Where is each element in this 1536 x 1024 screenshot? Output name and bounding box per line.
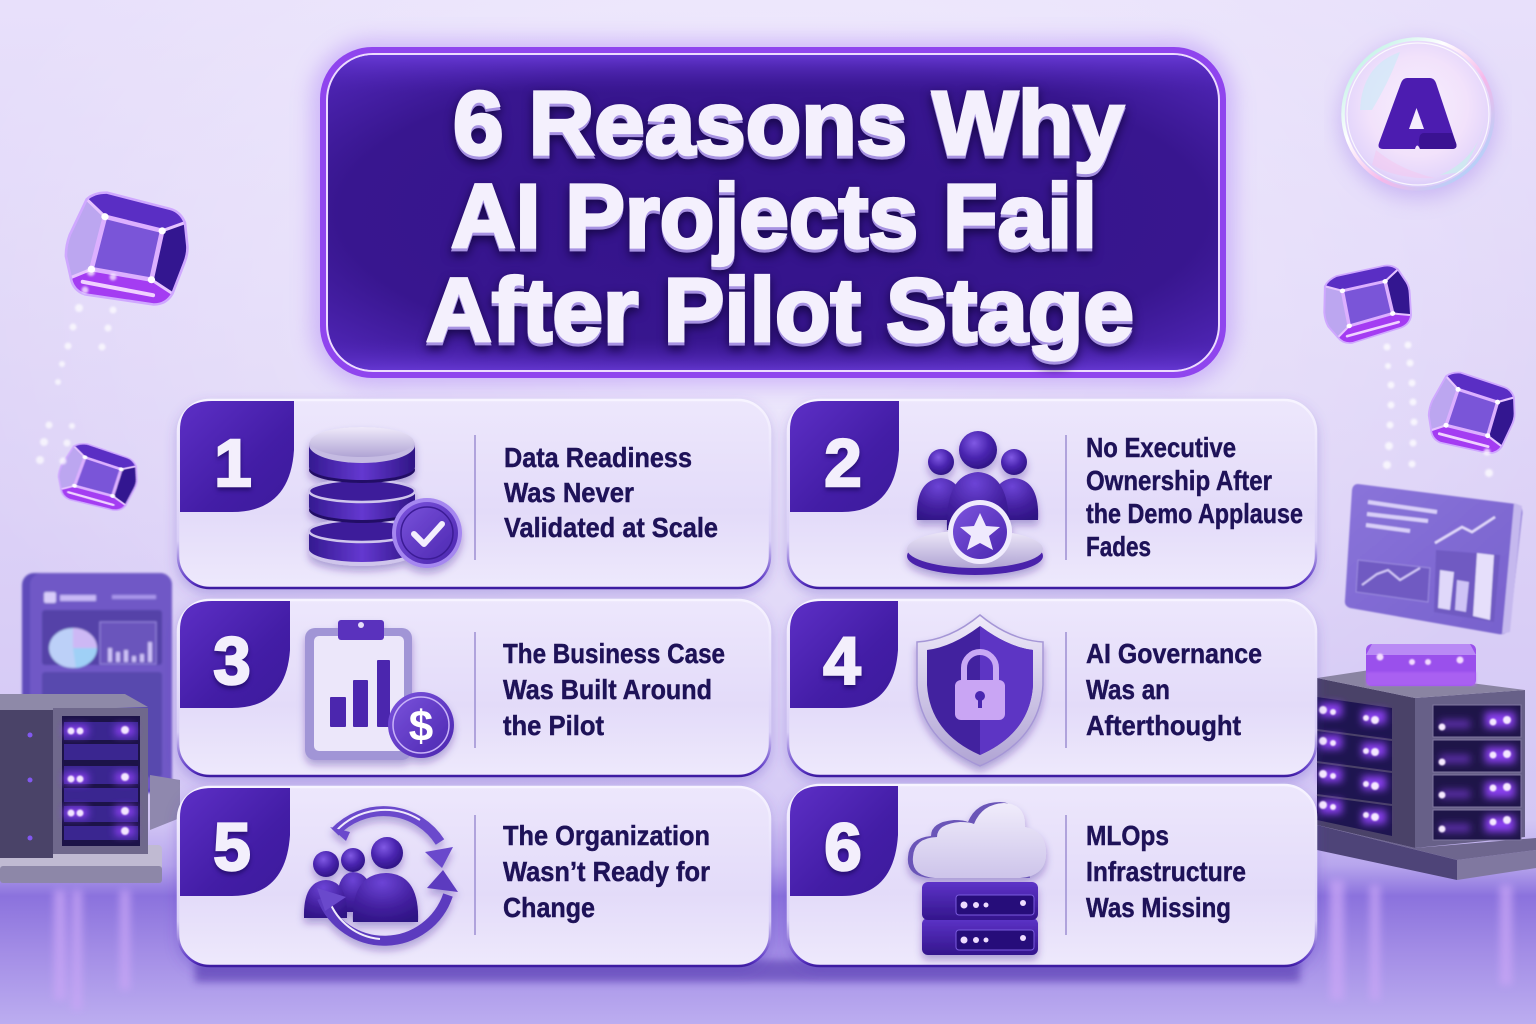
floor reflections bbox=[54, 880, 1512, 1010]
text 4 bbox=[1086, 638, 1262, 741]
logo letter mark bbox=[1378, 78, 1456, 149]
icon: cloud with servers bbox=[908, 802, 1046, 955]
text 1: Data Readiness bbox=[504, 442, 692, 473]
badge 2 bbox=[790, 401, 899, 512]
title text: AI Projects Fail bbox=[451, 167, 1097, 267]
text 3: the Pilot bbox=[503, 710, 604, 741]
text 6: Was Missing bbox=[1086, 892, 1231, 923]
icon: clipboard chart with dollar coin: $ bbox=[409, 702, 433, 751]
title panel bbox=[312, 40, 1234, 386]
card 5 bbox=[178, 787, 770, 966]
logo bubble bbox=[1340, 39, 1496, 198]
text 2: Ownership After bbox=[1086, 465, 1272, 496]
text 4: AI Governance bbox=[1086, 638, 1262, 669]
badge 3 bbox=[180, 601, 290, 708]
text 1: Was Never bbox=[504, 477, 634, 508]
icon: team with change arrows bbox=[304, 810, 458, 941]
text 4: Afterthought bbox=[1086, 710, 1241, 741]
card 1 bbox=[178, 400, 770, 588]
right floating gem lower bbox=[1422, 367, 1522, 459]
text 2: No Executive bbox=[1086, 432, 1236, 463]
number 5: 5 bbox=[213, 810, 251, 885]
text 6: Infrastructure bbox=[1086, 856, 1246, 887]
text 2: the Demo Applause bbox=[1086, 498, 1303, 529]
right floating gem top bbox=[1315, 258, 1419, 348]
left floating gem large bbox=[59, 187, 195, 311]
text 5: Wasn’t Ready for bbox=[503, 856, 710, 887]
number 6: 6 bbox=[824, 810, 862, 885]
left sparkle dots bbox=[36, 268, 116, 464]
text 6: MLOps bbox=[1086, 820, 1169, 851]
icon: shield with padlock bbox=[917, 615, 1043, 766]
number 4: 4 bbox=[823, 624, 861, 699]
badge 1 bbox=[180, 401, 294, 512]
text 3: The Business Case bbox=[503, 638, 725, 669]
text 3: Was Built Around bbox=[503, 674, 712, 705]
left dashboard panel bbox=[22, 573, 172, 793]
right floating dashboard bbox=[1345, 484, 1522, 634]
text 5 bbox=[503, 820, 710, 923]
right sparkle dots bbox=[1383, 342, 1493, 477]
icon: team with star on podium bbox=[907, 431, 1043, 575]
number 2: 2 bbox=[824, 426, 862, 501]
number 3: 3 bbox=[213, 624, 251, 699]
card 6 bbox=[788, 785, 1316, 966]
text 6 bbox=[1086, 820, 1246, 923]
text 5: Change bbox=[503, 892, 595, 923]
card 3 bbox=[178, 600, 770, 776]
text 1: Validated at Scale bbox=[504, 512, 718, 543]
badge 5 bbox=[180, 788, 290, 896]
icon: database with check bbox=[309, 427, 462, 568]
title text bbox=[426, 74, 1134, 361]
left floating gem small bbox=[53, 439, 143, 515]
badge 6 bbox=[790, 786, 898, 896]
text 1 bbox=[504, 442, 718, 543]
right server rack bbox=[1317, 644, 1536, 880]
text 3 bbox=[503, 638, 725, 741]
text 5: The Organization bbox=[503, 820, 710, 851]
number 1: 1 bbox=[214, 426, 252, 501]
icon: clipboard chart with dollar coin bbox=[305, 620, 454, 760]
card shadow on floor bbox=[195, 960, 1300, 982]
title text: 6 Reasons Why bbox=[453, 74, 1124, 174]
card 4 bbox=[788, 600, 1316, 776]
glowing cube on rack bbox=[1366, 644, 1476, 686]
text 4: Was an bbox=[1086, 674, 1170, 705]
text 2: Fades bbox=[1086, 531, 1151, 562]
card 2 bbox=[788, 400, 1316, 588]
text 2 bbox=[1086, 432, 1303, 562]
badge 4 bbox=[790, 601, 898, 708]
left server rack bbox=[0, 694, 180, 883]
title text: After Pilot Stage bbox=[426, 261, 1134, 361]
